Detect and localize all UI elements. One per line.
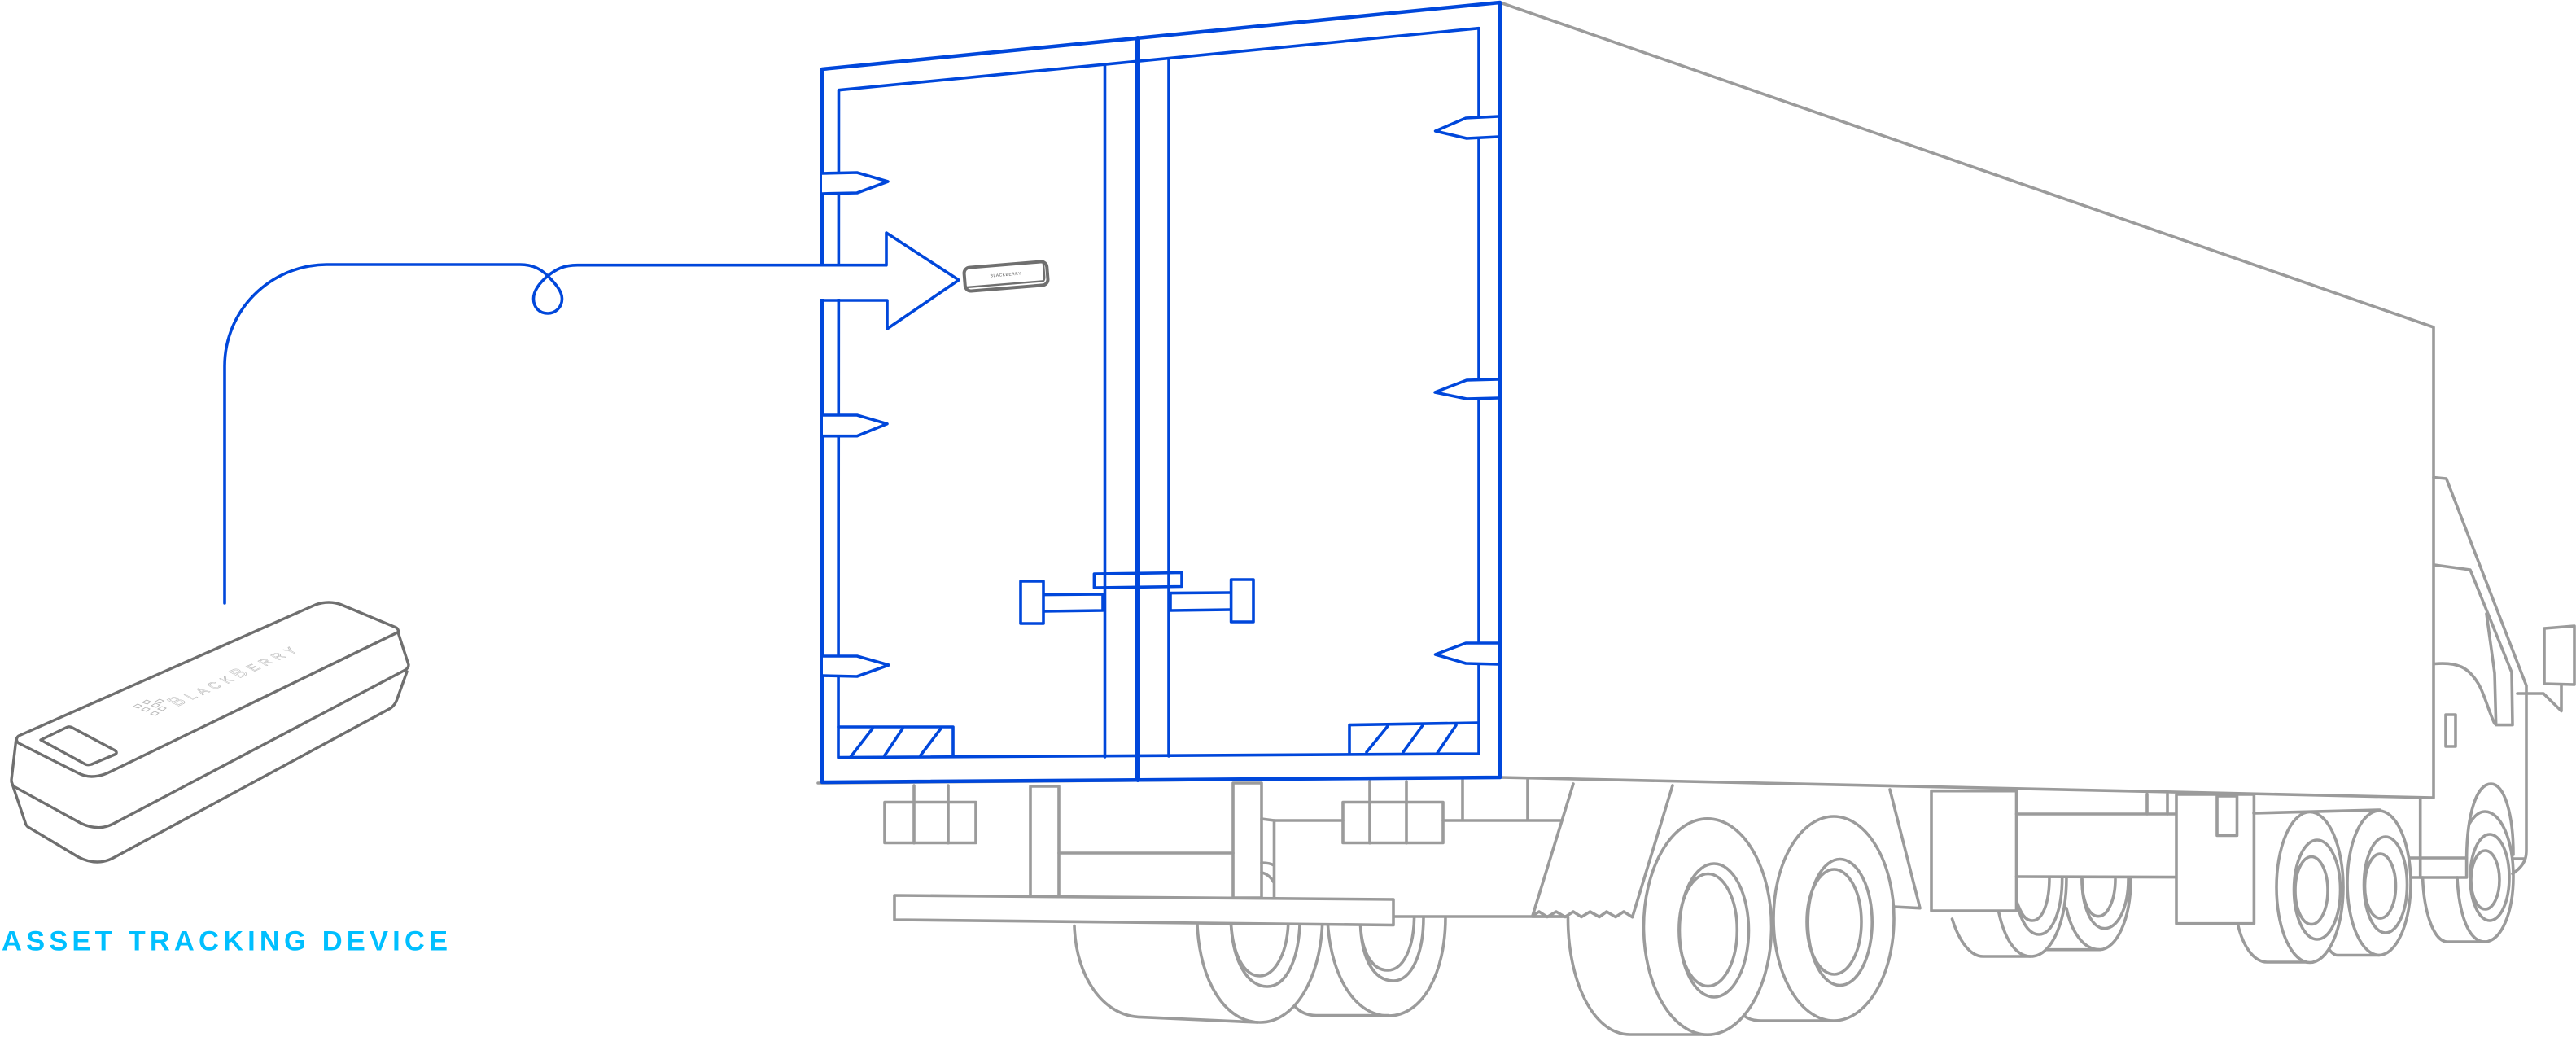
large asset tracking device <box>11 602 409 862</box>
middle wheels <box>1952 877 2131 956</box>
device window <box>41 727 116 765</box>
small tracking device on door <box>964 261 1048 291</box>
tandem rear axle <box>1568 816 1894 1035</box>
bumper <box>894 895 1393 925</box>
truck in grey outline <box>818 2 2574 1035</box>
arrow body mask and head <box>820 266 886 299</box>
left door hatched plate <box>838 727 953 757</box>
right door handle <box>1170 580 1253 622</box>
front tandem wheels <box>2276 811 2411 962</box>
device base <box>11 672 407 862</box>
device top face <box>16 602 398 777</box>
door latch <box>1094 573 1182 588</box>
door centre seam <box>1135 38 1140 780</box>
cab <box>2434 477 2526 874</box>
right door hinges <box>1435 116 1498 664</box>
device wordmark: BLACKBERRY <box>990 271 1022 279</box>
trailer side panel <box>818 2 2434 798</box>
blue trailer doors <box>822 2 1500 782</box>
fender <box>1890 790 1920 908</box>
mudflap with zigzag edge <box>1533 784 1673 917</box>
cab axle and steering wheel <box>2409 784 2513 942</box>
rear wheels behind bumper <box>1074 917 1445 1022</box>
rear support boxes and posts <box>885 780 1568 917</box>
left door handle <box>1021 581 1103 624</box>
BlackBerry logo on device <box>133 699 166 715</box>
arrow and connecting cable <box>225 233 959 603</box>
door inner frame <box>838 28 1479 758</box>
BlackBerry wordmark: BLACKBERRY <box>162 641 307 709</box>
side boxes <box>1931 791 2380 962</box>
inner door stiles <box>1105 59 1169 757</box>
label: asset tracking device: ASSET TRACKING DEVICE <box>2 926 448 957</box>
side mirror <box>2517 626 2574 711</box>
right door hatched plate <box>1349 723 1478 753</box>
left door hinges <box>822 173 889 676</box>
door outer frame <box>822 2 1500 782</box>
device body side <box>11 632 409 828</box>
